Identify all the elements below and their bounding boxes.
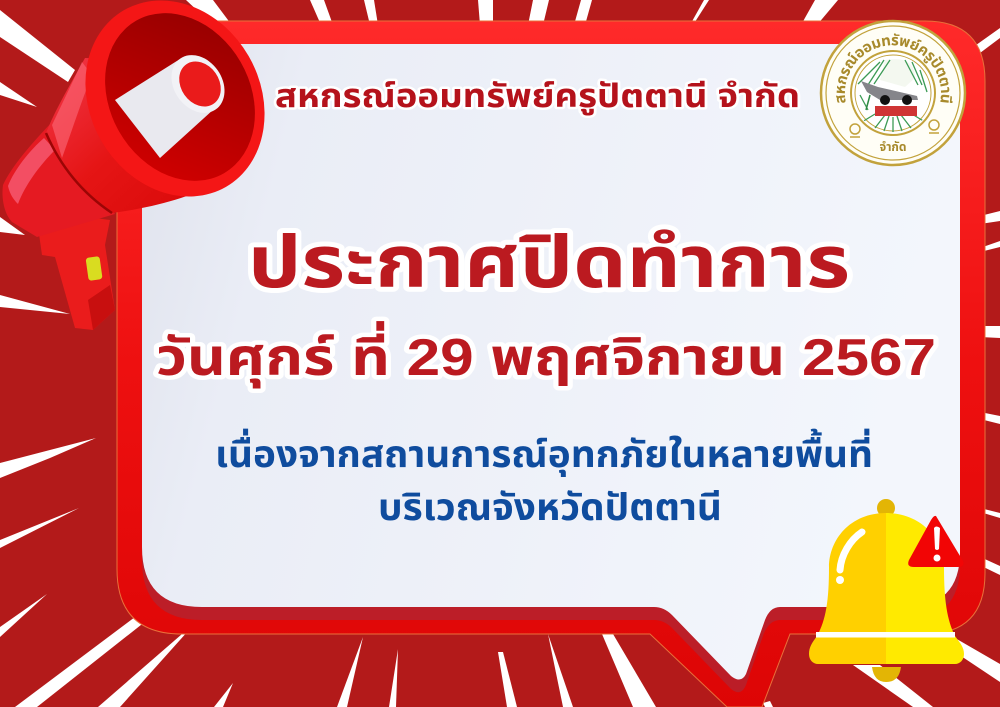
organisation seal: [820, 20, 966, 166]
seal ring text: สหกรณ์ออมทรัพย์ครูปัตตานี: [836, 33, 953, 103]
megaphone rear section: [2, 122, 115, 237]
seal small right ornament: [929, 120, 939, 133]
bell icon: [809, 499, 964, 682]
megaphone cone: [46, 58, 215, 213]
megaphone handle: [38, 215, 115, 330]
megaphone driver cap: [161, 45, 235, 123]
megaphone mouth with white driver: [105, 13, 255, 181]
warning triangle icon: [908, 516, 963, 567]
seal emblem: cannon: [858, 59, 927, 132]
seal lower text: จำกัด: [879, 140, 907, 154]
reason line two: บริเวณจังหวัดปัตตานี: [378, 487, 722, 528]
megaphone icon: [2, 0, 265, 330]
reason line one: เนื่องจากสถานการณ์อุทกภัยในหลายพื้นที่: [215, 428, 873, 477]
main title: closure announcement: ประกาศปิดทำการ: [248, 223, 850, 303]
organisation name heading: สหกรณ์ออมทรัพย์ครูปัตตานี จำกัด: [275, 77, 800, 116]
closure date: วันศุกร์ ที่ 29 พฤศจิกายน 2567: [156, 321, 936, 388]
megaphone rim: [50, 0, 300, 229]
seal small left ornament: [850, 124, 860, 137]
